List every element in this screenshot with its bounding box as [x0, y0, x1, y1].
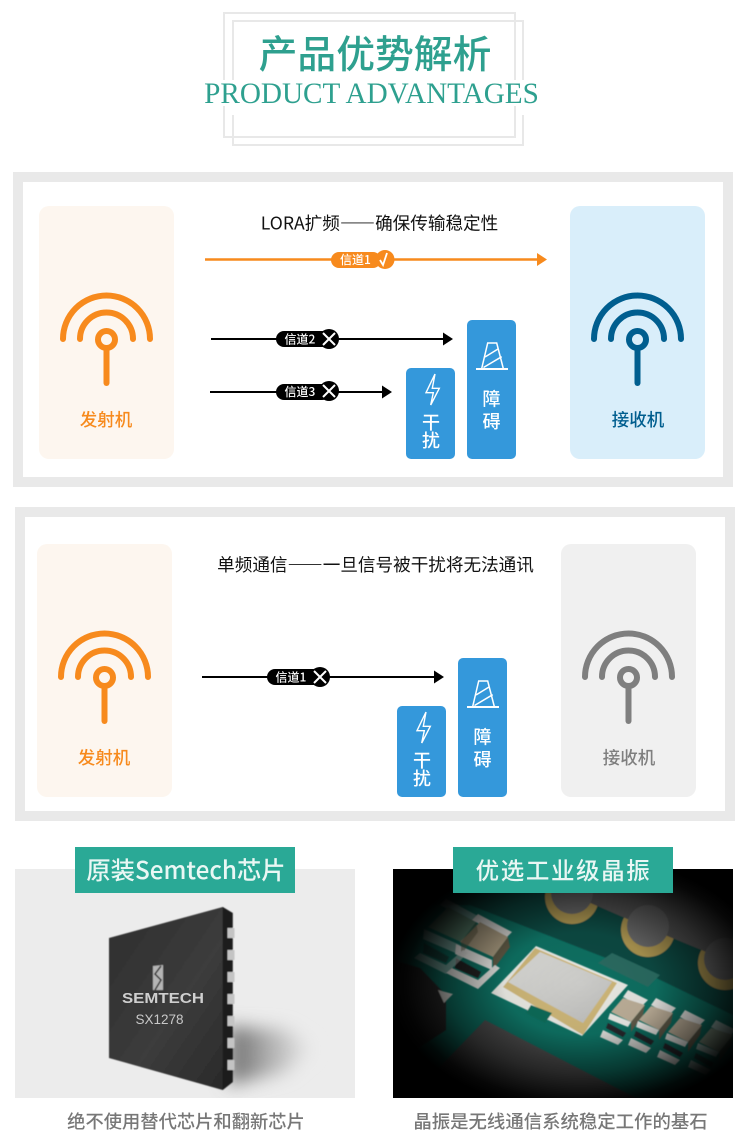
chip model: SX1278 — [135, 1012, 184, 1027]
photo: Semtech chip — [15, 869, 355, 1098]
arrow: channel 1 blocked: 信道1 — [276, 668, 307, 686]
chip brand: SEMTECH — [122, 991, 204, 1007]
icon: transmitter signal — [63, 296, 150, 383]
arrow: channel 2 blocked: 信道2 — [284, 330, 316, 348]
box: obstacle: 障 — [482, 386, 500, 412]
tag: industrial crystal — [453, 847, 673, 893]
caption: crystal: 晶振是无线通信系统稳定工作的基石 — [413, 1108, 708, 1134]
label: transmitter: 发射机 — [80, 407, 133, 432]
box: interference: 扰 — [413, 765, 431, 791]
panel heading: 单频通信——一旦信号被干扰将无法通讯 — [217, 552, 534, 577]
box: obstacle: 碍 — [474, 746, 492, 772]
title frame — [224, 13, 523, 145]
icon: receiver signal — [585, 634, 672, 721]
tag: industrial crystal: 优选工业级晶振 — [476, 852, 651, 886]
box: obstacle — [467, 320, 516, 459]
icon: transmitter signal — [61, 634, 148, 721]
arrow: channel 1 blocked — [202, 667, 444, 687]
photo: crystal oscillator on PCB — [393, 869, 750, 1100]
chip body — [109, 907, 234, 1090]
box: obstacle: 碍 — [482, 408, 500, 434]
card: receiver — [561, 544, 696, 797]
label: receiver: 接收机 — [603, 745, 656, 770]
card: transmitter — [39, 206, 174, 459]
label: transmitter: 发射机 — [78, 745, 131, 770]
icon: receiver signal — [594, 296, 681, 383]
label: receiver: 接收机 — [612, 407, 665, 432]
box: obstacle — [458, 658, 507, 797]
tag: original Semtech chip: 原装Semtech芯片 — [86, 851, 286, 886]
box: obstacle: 障 — [474, 724, 492, 750]
arrow: channel 1 success — [205, 250, 547, 269]
arrow: channel 3 blocked — [210, 381, 392, 401]
caption: chip: 绝不使用替代芯片和翻新芯片 — [67, 1108, 305, 1134]
panel heading: LORA扩频——确保传输稳定性 — [261, 210, 498, 236]
chip shadow — [228, 1026, 312, 1085]
card: receiver — [570, 206, 705, 459]
card: transmitter — [37, 544, 172, 797]
arrow: channel 1 success: 信道1 — [340, 251, 371, 268]
box: interference: 扰 — [422, 427, 440, 453]
box: interference — [397, 706, 446, 797]
arrow: channel 2 blocked — [211, 329, 453, 349]
title: 产品优势解析 — [259, 24, 491, 80]
subtitle: PRODUCT ADVANTAGES — [204, 78, 539, 110]
tag: original Semtech chip — [75, 847, 295, 893]
arrow: channel 3 blocked: 信道3 — [284, 383, 316, 400]
panel: single frequency — [20, 512, 730, 816]
box: interference — [406, 368, 455, 459]
box: interference: 干 — [413, 747, 431, 773]
box: interference: 干 — [422, 409, 440, 435]
panel: LORA spread spectrum — [18, 177, 728, 482]
